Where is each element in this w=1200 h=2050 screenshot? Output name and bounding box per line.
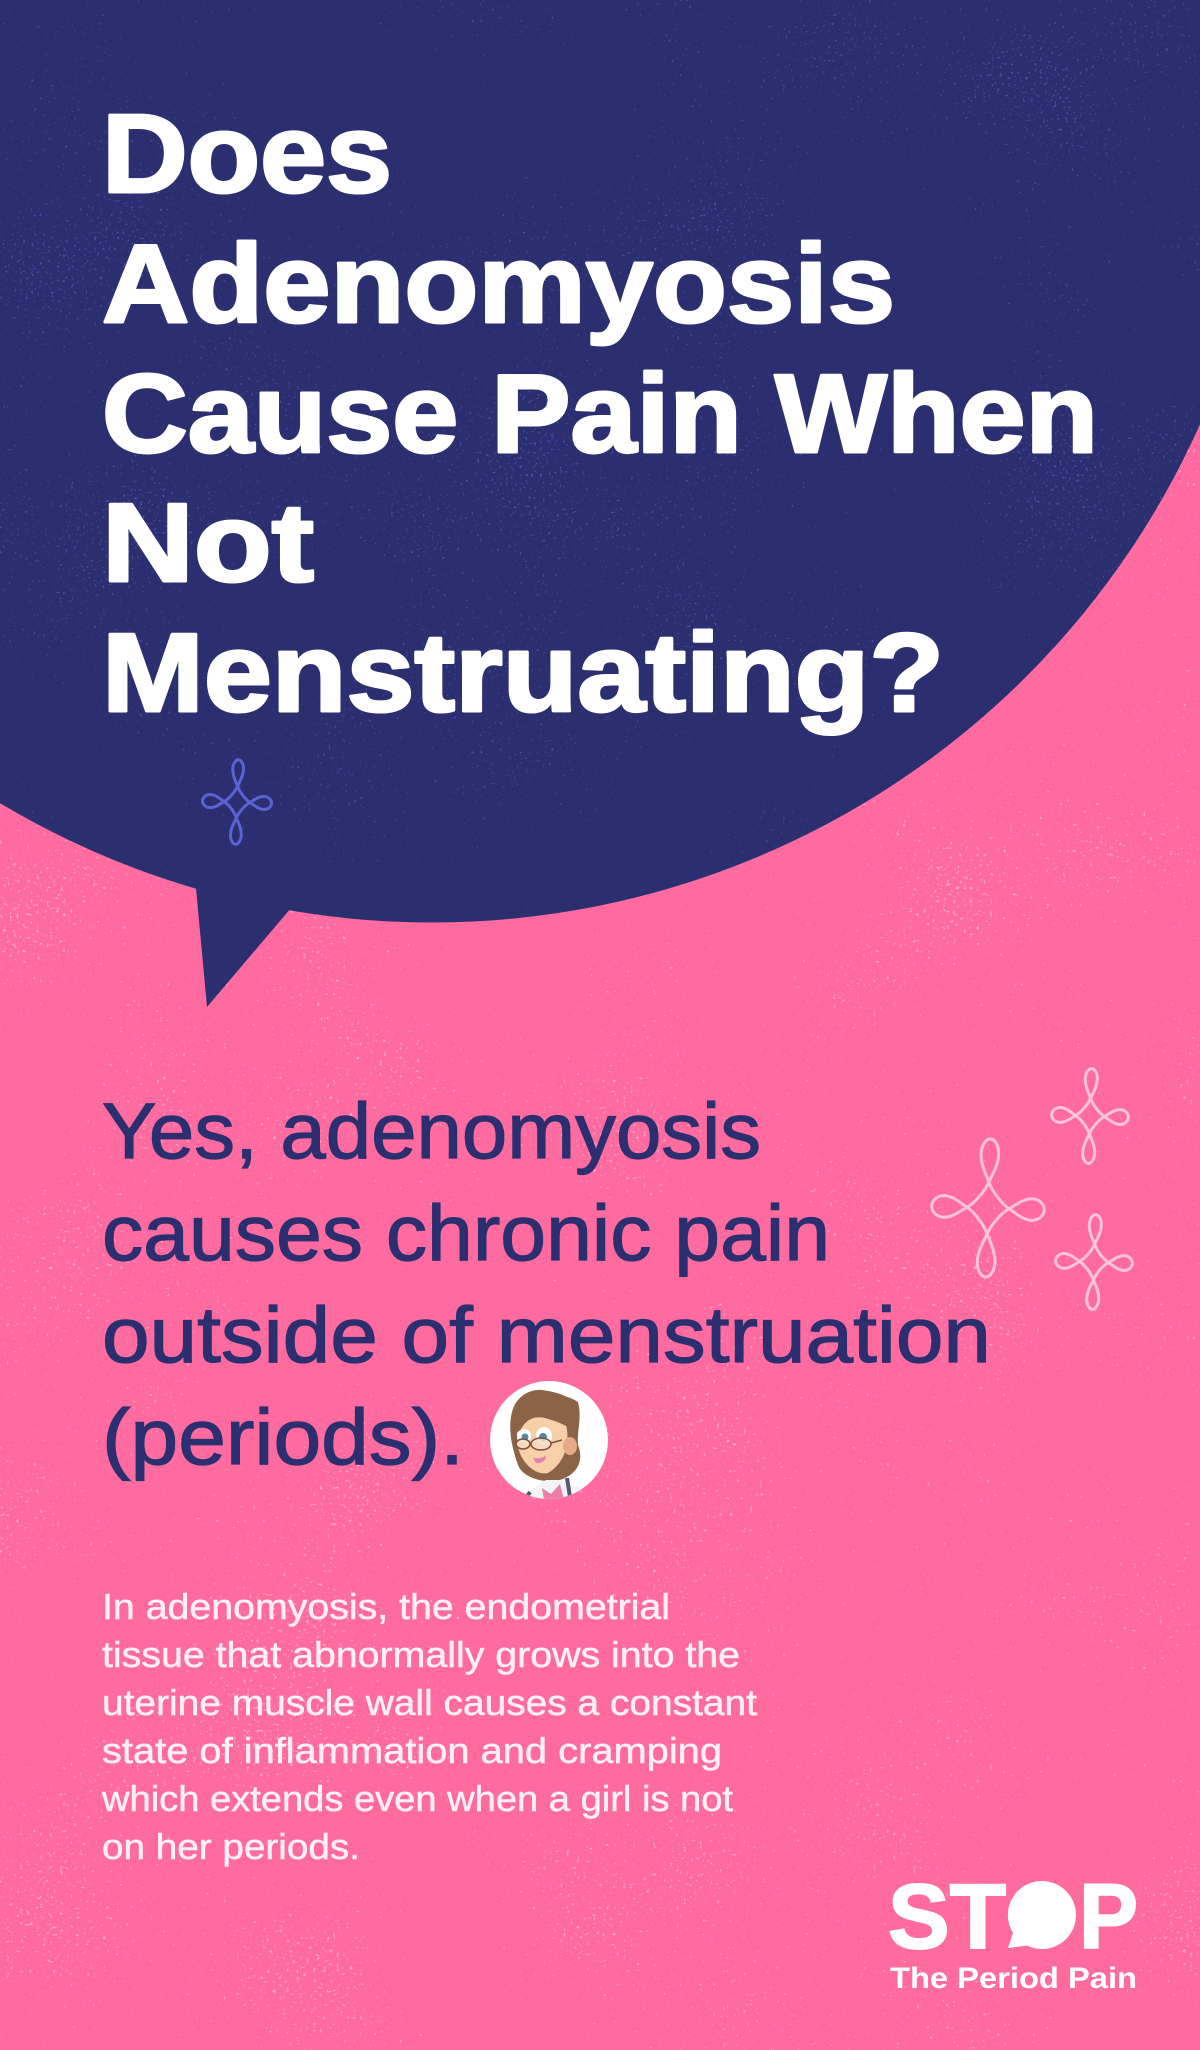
fringe	[517, 1396, 580, 1432]
icon: doctor avatar	[490, 1381, 608, 1500]
glasses	[516, 1439, 530, 1449]
icon: blue sparkle	[201, 759, 273, 845]
body text: In adenomyosis, the endometrial	[102, 1586, 670, 1627]
logo wordmark: ST	[888, 1866, 1006, 1968]
body text: state of inflammation and cramping	[102, 1730, 722, 1771]
title: Not	[102, 481, 314, 605]
answer heading: (periods).	[102, 1392, 464, 1481]
stethoscope and coat	[528, 1480, 580, 1499]
icon: large pink sparkle	[929, 1137, 1047, 1279]
answer heading: outside of menstruation	[102, 1290, 991, 1379]
body text: uterine muscle wall causes a constant	[102, 1682, 757, 1723]
icon: small pink sparkle bottom	[1054, 1213, 1134, 1311]
body text: tissue that abnormally grows into the	[102, 1634, 740, 1675]
icon: small pink sparkle top	[1050, 1067, 1130, 1165]
logo speech-bubble O	[1008, 1881, 1076, 1949]
title	[102, 92, 1098, 735]
title: Adenomyosis	[102, 222, 895, 346]
logo tagline: The Period Pain	[890, 1962, 1137, 1995]
logo: STOP The Period Pain	[888, 1866, 1138, 1995]
answer heading: causes chronic pain	[102, 1188, 830, 1277]
face	[517, 1413, 567, 1473]
logo letter P: P	[1079, 1866, 1138, 1968]
mouth	[533, 1455, 546, 1463]
title: Menstruating?	[102, 611, 944, 735]
answer heading: Yes, adenomyosis	[102, 1086, 761, 1175]
title: Does	[102, 92, 392, 216]
answer heading	[102, 1086, 991, 1481]
speech bubble: navy	[0, 0, 1200, 1007]
body text: which extends even when a girl is not	[101, 1778, 733, 1819]
title: Cause Pain When	[102, 352, 1098, 476]
body text: on her periods.	[102, 1826, 360, 1867]
ear	[563, 1437, 577, 1455]
body text	[101, 1586, 757, 1867]
eyes	[517, 1429, 531, 1443]
hair back	[510, 1390, 580, 1481]
